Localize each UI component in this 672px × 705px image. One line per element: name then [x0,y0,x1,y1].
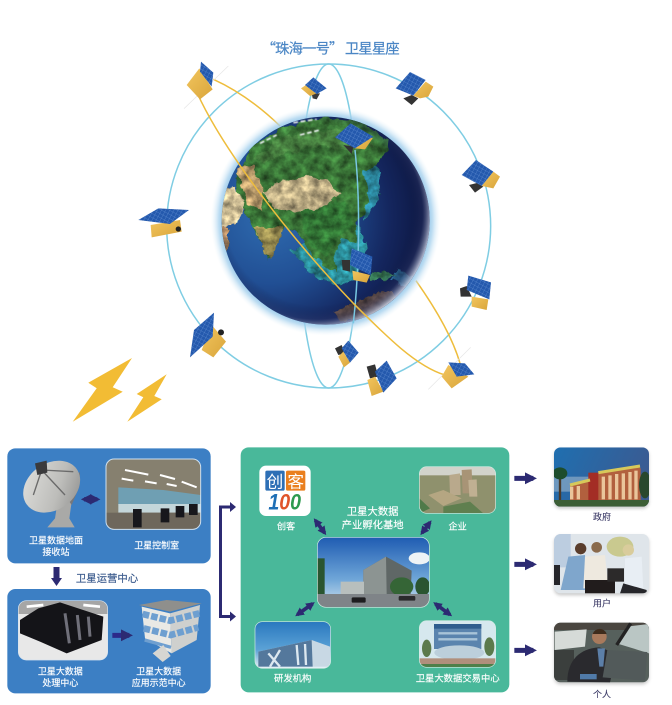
bracket connector [220,502,236,622]
satellite 4 [462,160,500,193]
icon: small lightning bolt [127,374,167,422]
logo: chuangke 100: 创 [267,472,283,491]
logo: chuangke 100: 客 [287,472,304,491]
panel: satellite operations, upper: 接收站 [43,546,69,557]
text: enterprise: 企业 [449,520,467,531]
text: users: 用户 [593,598,611,609]
text: operations centre: 卫星运营中心 [76,572,139,585]
atmosphere glow [211,106,441,336]
icon: application building [139,600,202,662]
logo: chuangke 100: 100 [268,489,302,514]
photo: data exchange centre [419,621,496,667]
satellite constellation diagram [138,38,500,396]
photo shadows [554,449,649,684]
text: chuangke: 创客 [277,520,295,531]
arrow: to users [514,557,533,572]
photo: research institute [255,622,331,668]
panel: satellite operations, upper [7,448,211,563]
panel: satellite operations, lower: 处理中心 [42,677,78,688]
satellite 2 [301,77,327,99]
limb shading [222,117,430,325]
photo: users [554,534,649,593]
yellow orbit front arc [197,93,445,375]
ocean [222,117,430,325]
icon: large lightning bolt [73,358,132,422]
panel: satellite operations, lower [7,589,211,693]
photo: control room [106,459,201,529]
earth globe [211,106,441,336]
satellite 12 [342,248,372,283]
photo: incubation base [317,537,430,607]
arrow: double horizontal [84,493,97,506]
text: individual: 个人 [593,689,611,699]
text: ground station: 卫星数据地面 [29,535,83,546]
outer orbit ring [167,64,491,388]
arrow: to individuals [514,643,533,658]
photo: government [553,447,651,507]
arrow: to research [297,604,313,615]
logo: chuangke 100 [259,466,311,516]
text: research institute: 研发机构 [274,672,311,683]
text: control room: 卫星控制室 [134,540,179,551]
satellite 11 [335,123,373,154]
yellow orbit rear arc [213,79,460,363]
arrow: right [112,628,129,643]
satellite 9 [190,313,226,357]
satellite 5 [460,276,491,310]
arrow: to government [514,471,533,486]
arrow: to enterprise [422,522,430,533]
satellite 6 [428,347,474,389]
satellite 10 [138,208,189,237]
satellite 7 [367,361,397,396]
satellite 1 [184,62,228,109]
arrow: to exchange [435,604,450,615]
icon: satellite dish [13,450,90,527]
panel: incubation base: 产业孵化基地 [342,518,404,531]
users column [514,447,651,699]
photo: individual [554,623,649,682]
text: data exchange centre: 卫星大数据交易中心 [416,672,500,683]
photo: enterprise [419,467,496,513]
photo: data processing centre [18,601,108,660]
title: “珠海一号” 卫星星座 [262,38,400,59]
arrow: to chuangke [315,520,325,533]
panel: incubation base [241,447,509,692]
polar orbit across globe [353,150,359,323]
text: application centre: 卫星大数据 [136,666,181,677]
continents [220,117,413,321]
polar orbit ellipse [299,64,359,388]
panel: satellite operations, lower: 应用示范中心 [132,677,186,688]
text: data processing centre: 卫星大数据 [38,666,83,677]
text: government: 政府 [593,511,611,522]
satellite 8 [335,341,359,367]
arctic coast [260,119,320,143]
arrow: down to data centre [51,567,62,586]
satellite 3 [396,72,433,105]
text: base heading: 卫星大数据 [347,505,398,518]
